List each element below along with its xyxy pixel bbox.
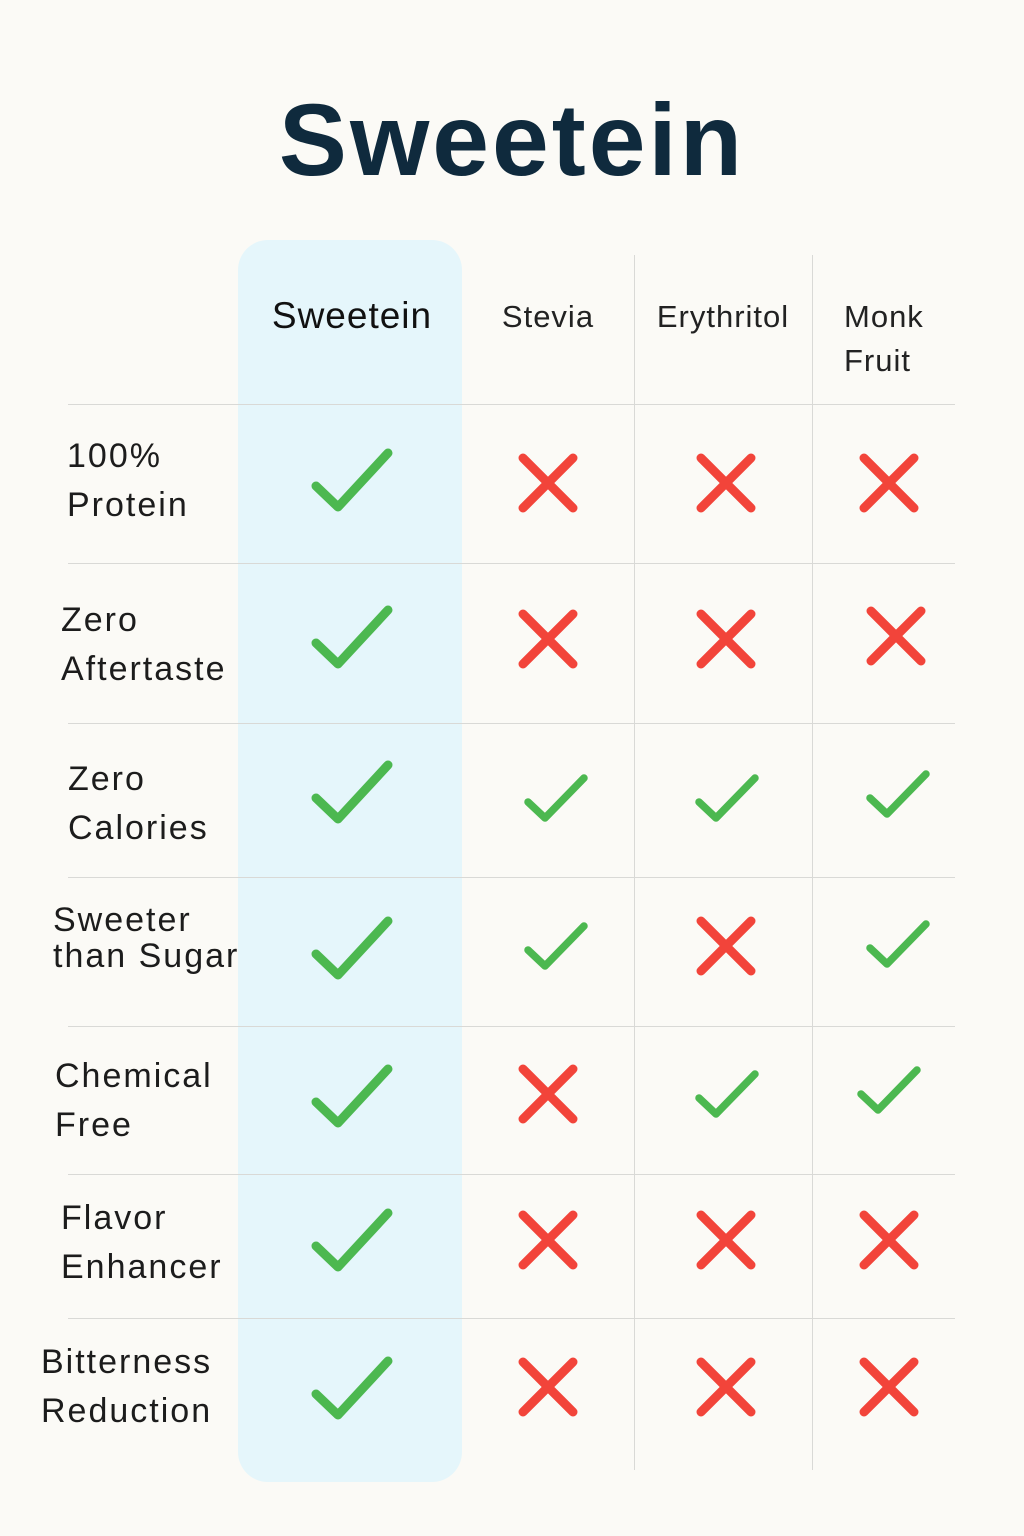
label: Sweeter [53,901,192,939]
header: Stevia: Stevia [502,299,594,334]
label: Aftertaste [61,650,227,688]
label: Free [55,1106,133,1144]
header: Monk Fruit: Monk [844,299,924,334]
label: Chemical [55,1057,213,1095]
label: Enhancer [61,1248,223,1286]
label: Reduction [41,1392,212,1430]
label: Flavor [61,1199,167,1237]
row labels [67,437,189,524]
Stevia marks [523,458,584,1412]
header: Monk Fruit: Fruit [844,343,911,378]
label: Zero [61,601,139,639]
Sweetein checks [316,453,388,1415]
title: Sweetein [279,83,745,197]
label [68,760,209,847]
row labels: 100% [67,437,162,475]
Erythritol marks [699,458,755,1412]
label: than Sugar [53,937,239,975]
header: Sweetein: Sweetein [272,295,432,336]
row labels: Protein [67,486,189,524]
header: Monk Fruit [844,299,924,378]
label: Bitterness [41,1343,212,1381]
label [41,1343,212,1430]
label [61,601,227,688]
label: Calories [68,809,209,847]
label [55,1057,213,1144]
label [53,901,239,975]
header: Erythritol: Erythritol [657,299,789,334]
label [61,1199,223,1286]
label: Zero [68,760,146,798]
highlight column [238,240,462,1482]
Monk Fruit marks [861,458,926,1412]
